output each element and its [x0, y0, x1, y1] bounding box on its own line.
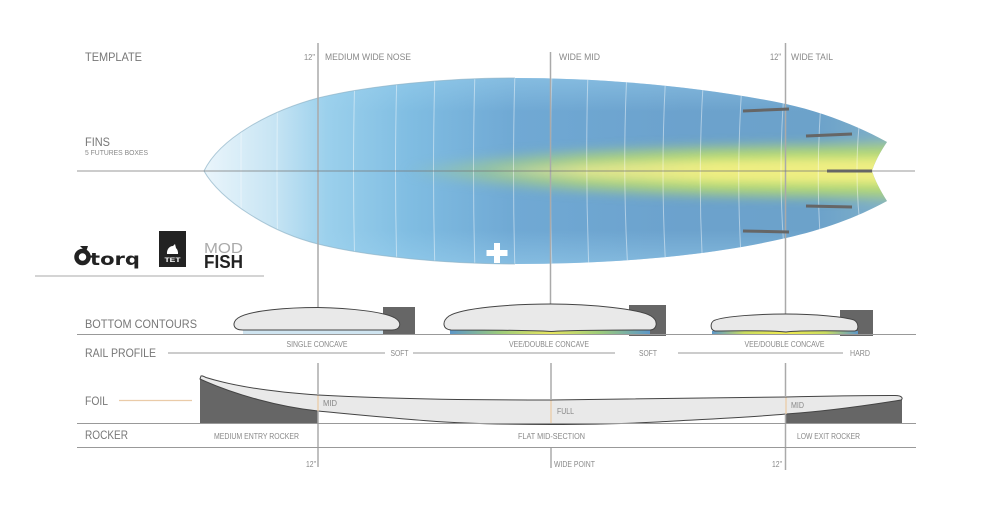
- top labels: outline widths: 12": [770, 52, 781, 62]
- bottom labels: WIDE POINT: [554, 460, 595, 469]
- heading: foil: FOIL: [85, 394, 108, 408]
- heading: fins: 5 FUTURES BOXES: [85, 150, 148, 157]
- bottom labels: 12": [306, 460, 316, 469]
- infographic: [35, 43, 916, 470]
- logo: TET: [159, 231, 186, 267]
- logo: TET: TET: [164, 258, 181, 264]
- bottom labels: [306, 460, 782, 469]
- heading: template: TEMPLATE: [85, 50, 142, 64]
- top labels: outline widths: WIDE TAIL: [791, 52, 833, 62]
- top labels: outline widths: 12": [304, 53, 315, 62]
- top labels: outline widths: [304, 52, 833, 62]
- contour labels: SINGLE CONCAVE: [286, 340, 348, 349]
- rocker labels: FLAT MID-SECTION: [518, 432, 585, 441]
- logo: mod fish: FISH: [204, 252, 243, 272]
- logo: torq: torq: [90, 250, 140, 270]
- heading: rocker: ROCKER: [85, 428, 128, 442]
- logo: torq: [76, 246, 140, 270]
- rail profile scale: SOFT: [390, 349, 409, 358]
- foil labels: MID: [323, 399, 337, 408]
- top labels: outline widths: WIDE MID: [559, 52, 600, 62]
- contour labels: [286, 340, 824, 349]
- rocker labels: MEDIUM ENTRY ROCKER: [214, 432, 299, 441]
- reference lines: board axes: [77, 43, 915, 314]
- surfboard template: [200, 70, 900, 272]
- rocker labels: LOW EXIT ROCKER: [797, 432, 860, 441]
- contour labels: VEE/DOUBLE CONCAVE: [509, 340, 589, 349]
- lower reference lines: [77, 363, 916, 470]
- logo: mod fish: MOD: [204, 240, 243, 257]
- rail cross-section: vee double concave mid: [444, 304, 666, 336]
- rail profile scale: HARD: [850, 349, 870, 358]
- rail profile scale: [168, 349, 870, 358]
- rail profile scale: SOFT: [639, 349, 657, 358]
- logo: mod fish: [204, 240, 243, 272]
- foil labels: FULL: [557, 407, 574, 416]
- rocker labels: [214, 432, 860, 441]
- logos: [76, 231, 243, 272]
- heading: rail profile: RAIL PROFILE: [85, 346, 156, 360]
- rail cross-section: single concave: [234, 307, 415, 335]
- heading: fins: [85, 135, 148, 157]
- contour labels: VEE/DOUBLE CONCAVE: [744, 340, 824, 349]
- heading: bottom contours: BOTTOM CONTOURS: [85, 317, 197, 331]
- heading: fins: FINS: [85, 135, 110, 149]
- top labels: outline widths: MEDIUM WIDE NOSE: [325, 52, 411, 62]
- fins: 5 futures boxes: [743, 109, 872, 232]
- foil and rocker profile: [200, 376, 902, 424]
- foil labels: MID: [791, 401, 804, 410]
- bottom labels: 12": [772, 460, 782, 469]
- rail cross-section: vee double concave tail: [711, 310, 873, 336]
- foil labels: [323, 399, 804, 416]
- icon: plus sign on deck: [486, 243, 508, 263]
